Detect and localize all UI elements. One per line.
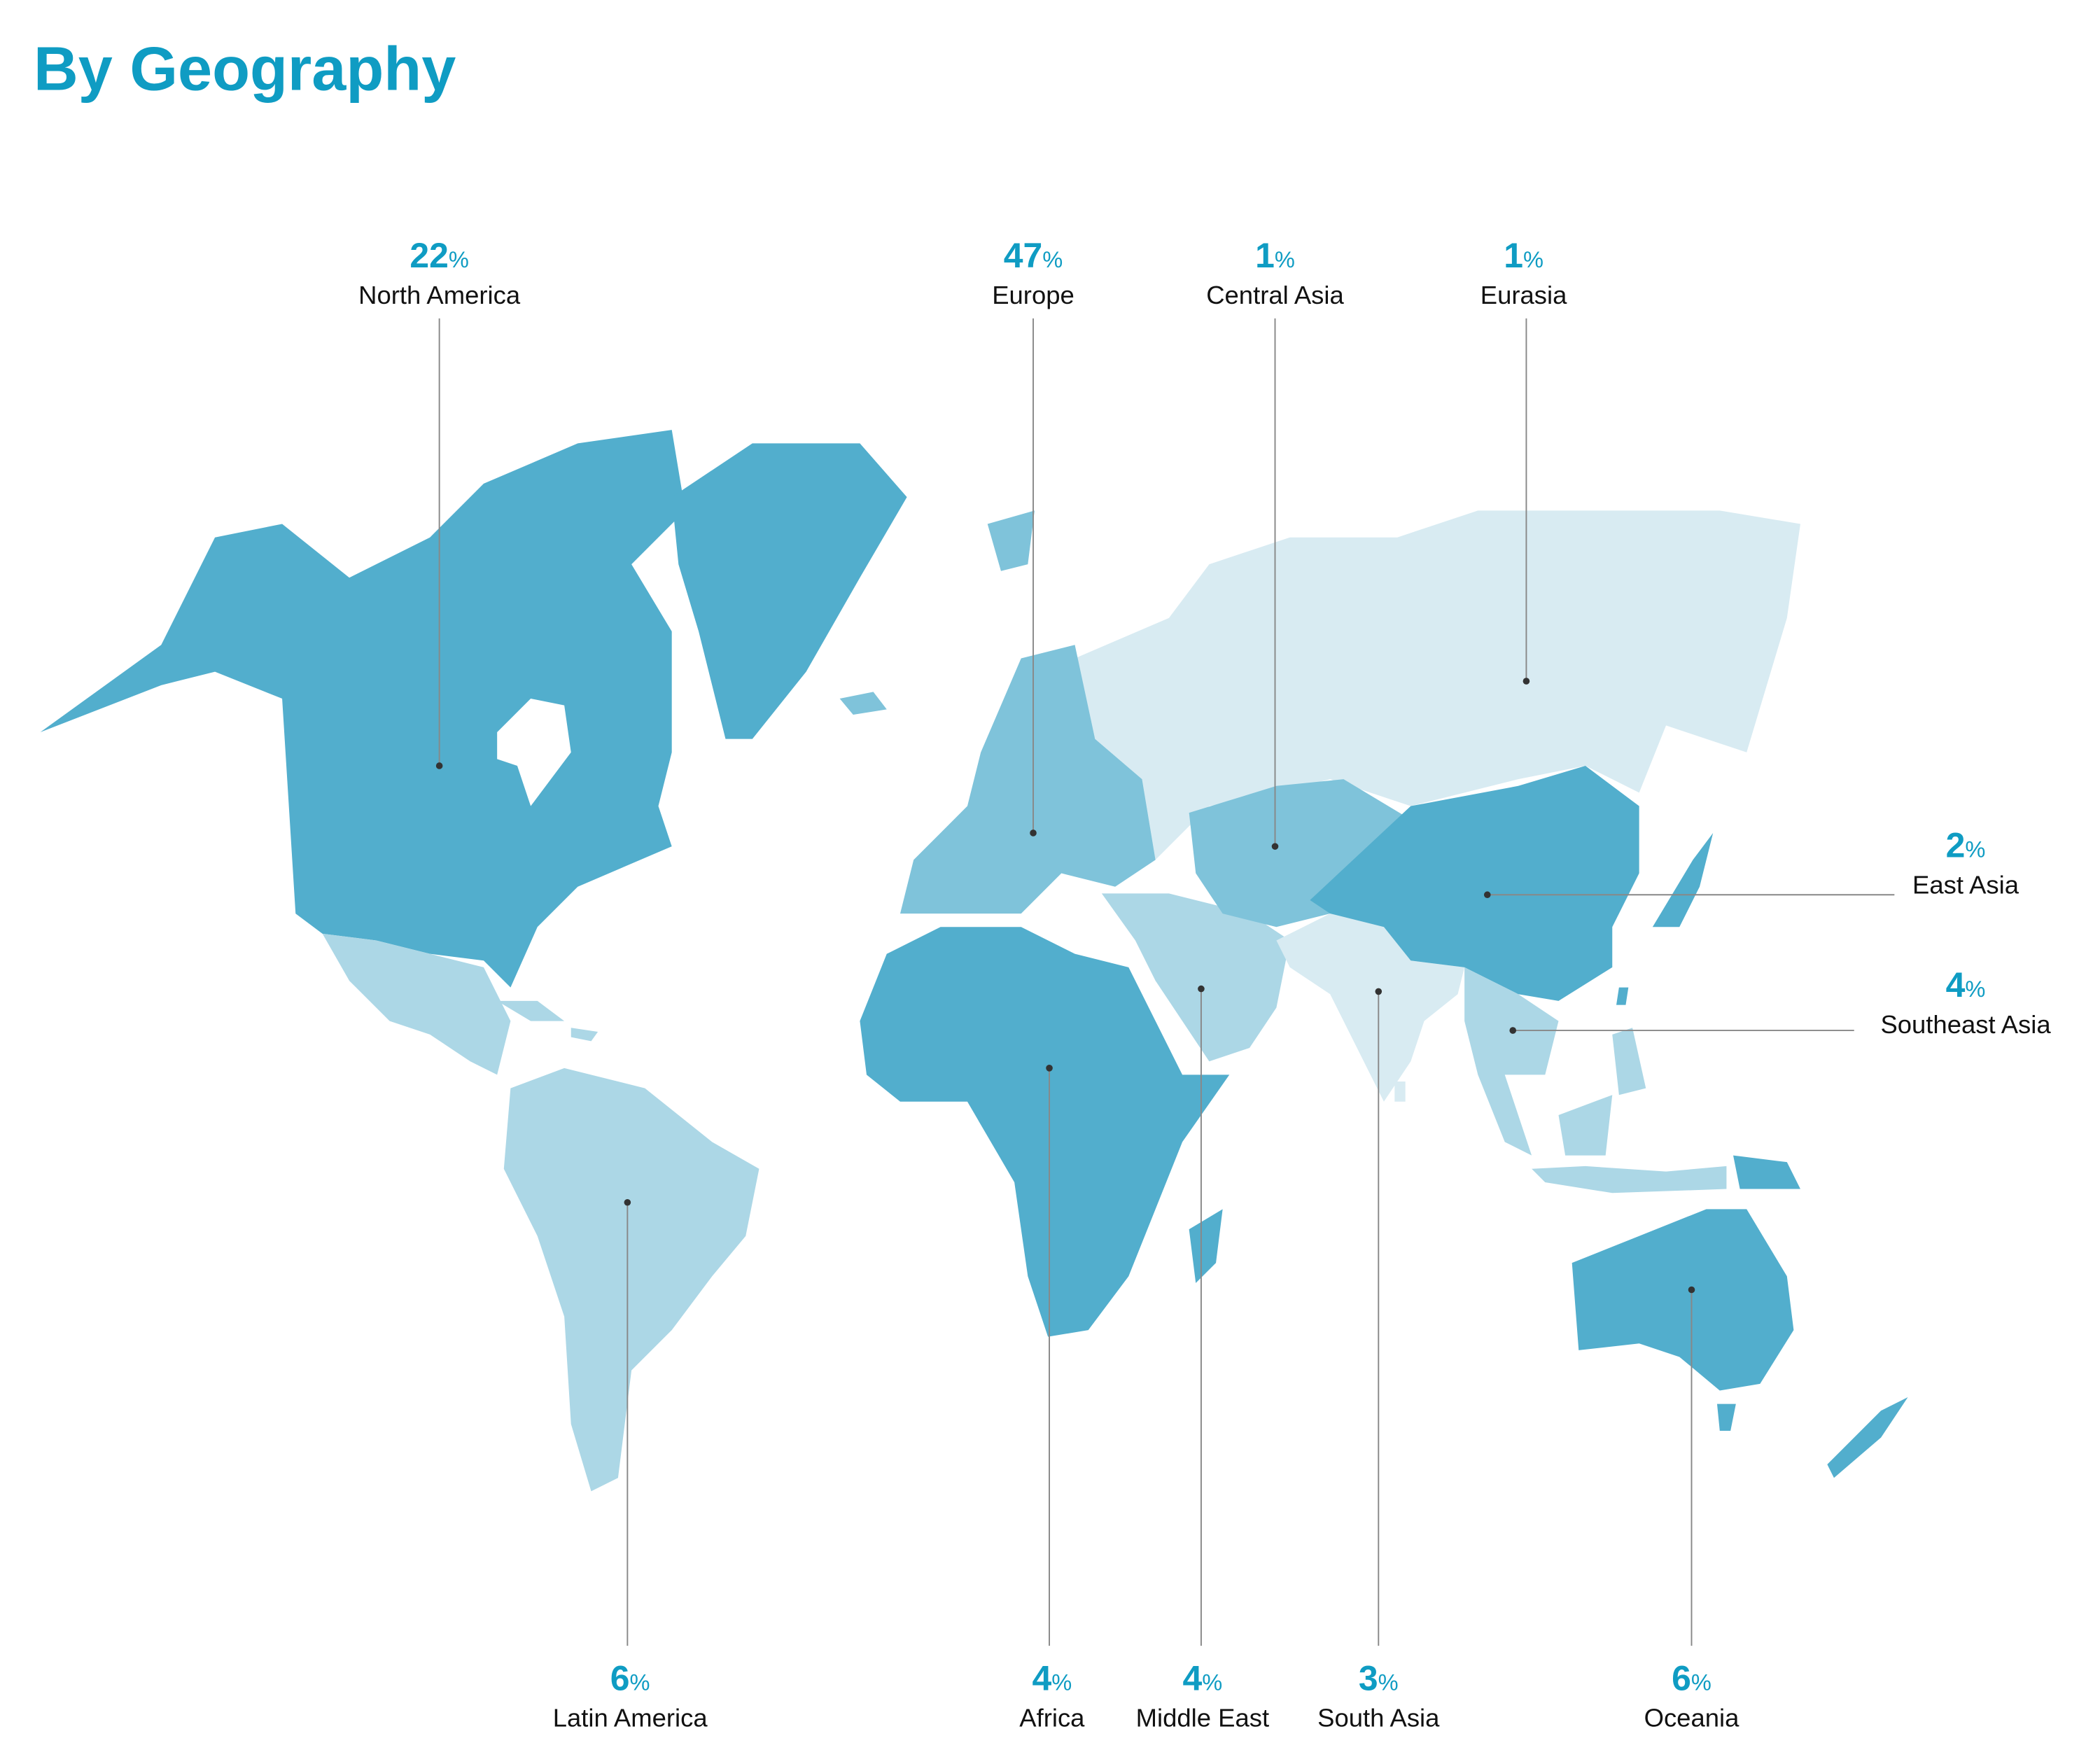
label: South Asia: South Asia bbox=[1317, 1703, 1440, 1732]
label: Oceania: 6% bbox=[1672, 1658, 1712, 1698]
label: Oceania bbox=[1644, 1658, 1740, 1732]
label: Africa: Africa bbox=[1019, 1703, 1085, 1732]
label: Eurasia bbox=[1480, 236, 1567, 309]
region: North America bbox=[41, 430, 907, 988]
label: Central Asia: Central Asia bbox=[1206, 281, 1344, 309]
label: East Asia: East Asia bbox=[1912, 870, 2019, 899]
label: North America: 22% bbox=[410, 236, 469, 275]
title: By Geography bbox=[34, 34, 456, 104]
region: South Asia bbox=[1276, 913, 1464, 1102]
label: North America: North America bbox=[358, 281, 521, 309]
label: Middle East: 4% bbox=[1182, 1658, 1222, 1698]
label: Latin America bbox=[553, 1658, 708, 1732]
label: Europe bbox=[992, 236, 1074, 309]
label: South Asia bbox=[1317, 1658, 1440, 1732]
region: East Asia bbox=[1310, 766, 1713, 1005]
label: Latin America: Latin America bbox=[553, 1703, 708, 1732]
region: Africa bbox=[860, 927, 1229, 1337]
marker dots bbox=[436, 678, 1695, 1293]
label: Central Asia: 1% bbox=[1255, 236, 1295, 275]
label: South Asia: 3% bbox=[1359, 1658, 1399, 1698]
label: Southeast Asia: 4% bbox=[1946, 965, 1985, 1004]
label: East Asia bbox=[1912, 825, 2019, 899]
label: Africa: 4% bbox=[1032, 1658, 1072, 1698]
region: Southeast Asia bbox=[1464, 967, 1726, 1193]
label: Europe: 47% bbox=[1004, 236, 1063, 275]
label: Europe: Europe bbox=[992, 281, 1074, 309]
Hudson Bay bbox=[497, 699, 571, 806]
region: Europe bbox=[840, 510, 1156, 913]
label: Central Asia bbox=[1206, 236, 1344, 309]
region: Eurasia (Russia) bbox=[1075, 510, 1800, 860]
label: Latin America: 6% bbox=[610, 1658, 650, 1698]
label: North America bbox=[358, 236, 521, 309]
label: Middle East bbox=[1136, 1658, 1269, 1732]
region: Middle East bbox=[1102, 893, 1290, 1061]
label: Southeast Asia bbox=[1880, 965, 2051, 1039]
label: Oceania: Oceania bbox=[1644, 1703, 1740, 1732]
label: East Asia: 2% bbox=[1946, 825, 1985, 864]
region: Oceania bbox=[1572, 1156, 1908, 1478]
region: Latin America bbox=[323, 934, 759, 1491]
label: Middle East: Middle East bbox=[1136, 1703, 1269, 1732]
label: Southeast Asia: Southeast Asia bbox=[1880, 1010, 2051, 1039]
label: Eurasia: Eurasia bbox=[1480, 281, 1567, 309]
leader lines bbox=[440, 318, 1894, 1646]
region: Central Asia bbox=[1189, 779, 1410, 927]
label: Africa bbox=[1019, 1658, 1085, 1732]
world map bbox=[41, 430, 1908, 1491]
label: Eurasia: 1% bbox=[1504, 236, 1544, 275]
